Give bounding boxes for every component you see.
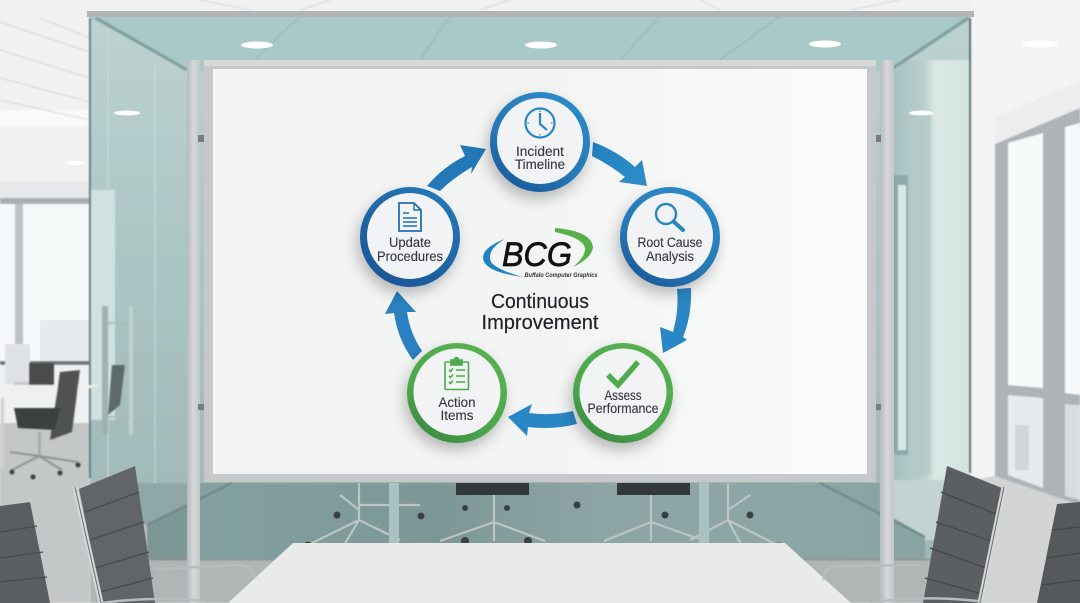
arrow: root cause to assess performance: [660, 288, 691, 353]
label: action items: [438, 395, 476, 423]
label: assess performance: Performance: [588, 401, 658, 416]
whiteboard panel: [204, 60, 876, 482]
label: assess performance: [588, 388, 658, 416]
node: incident timeline: [490, 92, 590, 192]
title: continuous improvement: Improvement: [482, 311, 599, 334]
logo: BCG: Buffalo Computer Graphics: [524, 272, 598, 279]
label: incident timeline: [515, 144, 565, 172]
label: update procedures: Update: [389, 235, 431, 250]
logo: BCG: BCG: [502, 236, 572, 274]
icon: magnifying glass: [656, 204, 683, 230]
conference table: [228, 543, 851, 603]
node: assess performance: [573, 343, 673, 443]
arrow: action items to update procedures: [385, 291, 422, 360]
wall posts: [187, 60, 894, 603]
arrow: incident timeline to root cause: [592, 142, 647, 186]
label: incident timeline: Timeline: [515, 157, 565, 172]
floor inside glass room: [90, 480, 970, 603]
arrow: assess performance to action items: [508, 404, 577, 436]
logo: BCG: [483, 228, 598, 279]
glass mullions below board: [389, 483, 709, 543]
label: update procedures: [377, 235, 443, 264]
label: root cause analysis: Root Cause: [638, 235, 702, 250]
label: update procedures: Procedures: [377, 249, 443, 264]
label: assess performance: Assess: [604, 388, 642, 403]
icon: check mark: [608, 362, 638, 385]
node: update procedures: [360, 187, 460, 287]
icon: clock: [526, 108, 554, 138]
title: continuous improvement: Continuous: [491, 290, 589, 313]
icon: document: [399, 203, 421, 231]
label: incident timeline: Incident: [516, 144, 564, 159]
front right chairs: [824, 466, 1080, 603]
label: root cause analysis: Analysis: [646, 249, 694, 264]
label: action items: Action: [438, 395, 476, 410]
glass meeting room walls: [89, 16, 971, 560]
icon: clipboard checklist: [445, 358, 468, 390]
front left chairs: [0, 466, 254, 603]
node: root cause analysis: [620, 187, 720, 287]
ceiling lights: [65, 40, 1058, 165]
title: continuous improvement: [482, 290, 599, 334]
ceiling header bar: [87, 11, 974, 17]
label: action items: Items: [440, 408, 474, 423]
node: action items: [407, 343, 507, 443]
arrow: update procedures to incident timeline: [427, 145, 486, 191]
chair bases seen under the whiteboard: [304, 483, 784, 559]
label: root cause analysis: [638, 235, 702, 264]
background office desk and chairs: [0, 306, 133, 480]
